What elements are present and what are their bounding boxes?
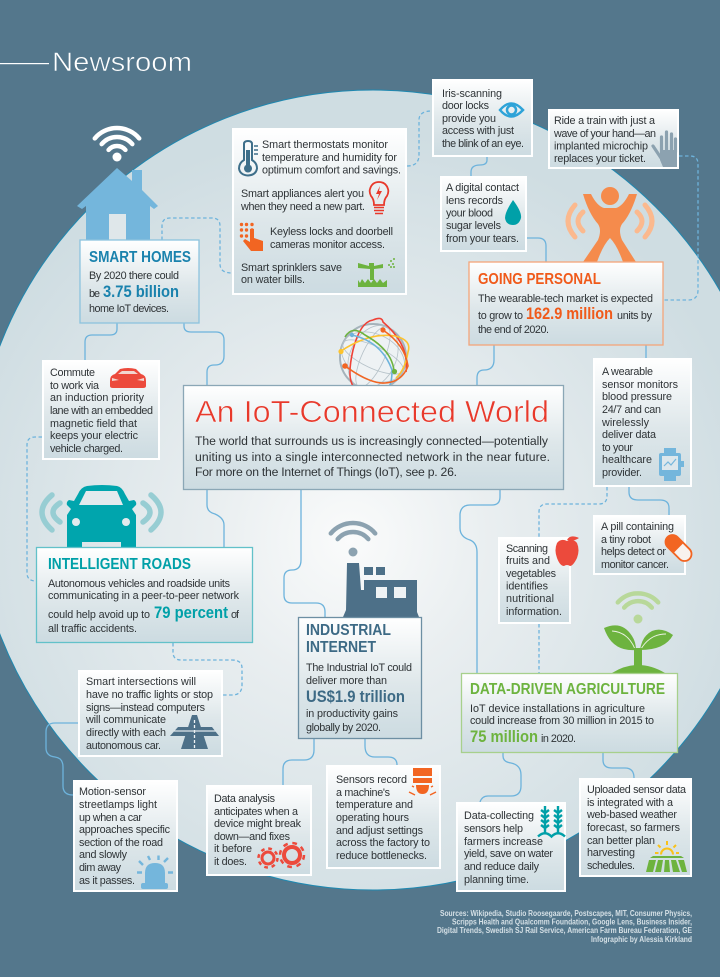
text: data-collecting [464,810,553,886]
icon: alarm light [137,856,173,889]
text: industrial internet stat: US$1.9 trillion [306,687,405,706]
text: agriculture stat: IoT device installations in agriculture [470,703,645,715]
panel: train microchip [549,110,678,168]
text: commute: magnetic field that [50,418,137,430]
text: train: Ride a train with just a [554,115,655,127]
text: train: replaces your ticket. [554,153,646,165]
text: commute: vehicle charged. [50,443,123,455]
text: sprinklers: on water bills. [241,274,305,286]
panel: smart homes [80,240,199,323]
icon: plant with wifi [604,593,673,673]
text: uploaded data: harvesting [587,847,635,859]
icon: teal car with signal waves [42,485,161,547]
text: machine sensors: operating hours [336,812,410,824]
text: pill: A pill containing [601,521,674,533]
text: data analysis [214,793,302,868]
text: introduction: The world that surrounds us is increasingly connected—potentially [195,434,549,448]
text: train: wave of your hand—an [553,128,656,140]
panel: contact lens [441,177,526,251]
icon: sprinkler [358,258,395,287]
text: scanning fruit: Scanning [506,543,548,555]
text: data-collecting: Data-collecting [464,810,534,822]
text: contact lens: lens records [446,195,504,207]
text: uploaded data: is integrated with a [587,797,673,809]
text: locks: Keyless locks and doorbell [270,226,393,238]
text: intersections [85,676,213,752]
text: wearable sensor [601,366,679,479]
text: introduction: uniting us into a single interconnected network in the near future. [195,450,550,464]
text: machine sensors: Sensors record [336,774,407,786]
icon: house with wifi [77,128,158,241]
text: streetlamps [79,786,171,887]
text: uploaded data: can better plan [587,835,655,847]
icon: smart watch [659,448,684,481]
icon: red sports car [110,368,146,388]
text: wearable sensor: wirelessly [601,417,650,429]
text: intelligent roads stat: 79 percent [154,603,228,622]
text: intersections: autonomous car. [86,740,161,752]
icon: gears [258,843,304,868]
section label: Newsroom: Newsroom [52,47,192,77]
text: thermostats: optimum comfort and savings. [262,164,401,176]
text: commute: to work via [50,380,99,392]
panel: uploaded sensor data [580,779,691,876]
text: thermostats: temperature and humidity for [262,152,397,164]
text: agriculture stat: in 2020. [541,733,576,745]
text: wearable sensor: A wearable [602,366,653,378]
text: commute [50,367,153,455]
text: introduction: For more on the Internet of Things (IoT), see p. 26. [195,465,457,479]
text: pill: helps detect or [601,546,666,558]
heading: data-driven agriculture: DATA-DRIVEN AGRICULTURE [470,681,665,698]
text: data-collecting: planning time. [464,874,529,886]
text: pill [601,521,674,571]
icon: eye [500,104,523,116]
text: streetlamps: dim away [79,862,122,874]
text: data-collecting: and reduce daily [464,861,540,873]
text: machine sensors: across the factory to [336,837,430,849]
text: scanning fruit: vegetables [506,568,557,580]
text: iris scanning: door locks [442,100,490,112]
text: commute: Commute [50,367,95,379]
text: uploaded data: web-based weather [586,809,677,821]
icon: thermometer [239,141,258,176]
text: introduction [195,434,550,479]
text: scanning fruit: information. [506,606,562,618]
panel: smart intersections [79,671,222,756]
icon: wheat [538,806,565,836]
text: iris scanning [442,88,524,150]
icon: globe with colored orbits [333,317,413,397]
text: intelligent roads stat: communicating in a peer-to-peer network [48,590,240,602]
panel: smart home features [233,129,406,294]
text: data analysis: it does. [214,856,247,868]
connector lines [27,111,698,802]
text: wearable sensor: blood pressure [602,391,672,403]
text: intersections: have no traffic lights or stop [86,689,213,701]
text: appliances [240,188,365,213]
text: thermostats: Smart thermostats monitor [262,139,388,151]
text: data analysis: it before [214,843,252,855]
icon: highway [170,715,219,749]
text: streetlamps: streetlamps light [79,799,157,811]
text: smart homes stat [89,270,179,315]
heading: going personal: GOING PERSONAL [478,271,601,288]
heading: intelligent roads: INTELLIGENT ROADS [48,556,191,573]
text: going personal stat: the end of 2020. [478,324,549,336]
panel: data-driven agriculture [462,674,678,752]
text: going personal stat: to grow to [478,310,523,322]
panel: going personal [469,262,663,345]
panel: iris scanning [433,80,532,156]
text: machine sensors: and adjust settings [336,825,424,837]
text: machine sensors [336,774,430,862]
text: sprinklers: Smart sprinklers save [241,262,342,274]
text: data analysis: device might break [214,818,302,830]
text: appliances: Smart appliances alert you [241,188,364,200]
icon: factory with wifi [331,523,419,617]
text: going personal stat: units by [617,310,653,322]
text: intersections: Smart intersections will [86,676,196,688]
text: wearable sensor: to your [602,442,633,454]
panel: commute induction lane [43,361,159,459]
text: appliances: when they need a new part. [240,201,365,213]
text: scanning fruit: fruits and [506,555,550,567]
text: commute: an induction priority [50,392,145,404]
text: locks: cameras monitor access. [270,239,385,251]
text: smart homes stat: 3.75 billion [103,282,179,301]
text: pill: monitor cancer. [601,559,669,571]
icon: sun over field [646,841,687,872]
heading: smart homes: SMART HOMES [89,249,191,266]
text: data analysis: Data analysis [214,793,276,805]
text: streetlamps: as it passes. [79,875,135,887]
text: intelligent roads stat: of [231,609,240,621]
text: machine sensors: a machine's [336,787,391,799]
text: wearable sensor: sensor monitors [602,379,679,391]
text: intelligent roads stat [48,578,240,635]
text: iris scanning: the blink of an eye. [442,138,524,150]
text: intersections: directly with each [86,727,166,739]
text: contact lens: from your tears. [446,233,519,245]
text: data-collecting: farmers increase [464,836,543,848]
icon: keypad and finger [240,223,263,251]
text: wearable sensor: 24/7 and can [602,404,661,416]
text: streetlamps: and slowly [79,849,128,861]
text: going personal stat: 162.9 million [526,304,613,323]
text: contact lens: A digital contact [446,182,519,194]
text: smart homes stat: be [89,288,100,300]
text: uploaded data: forecast, so farmers [587,822,681,834]
text: iris scanning: provide you [442,113,496,125]
text: uploaded data: Uploaded sensor data [587,784,686,796]
text: wearable sensor: healthcare [602,454,652,466]
text: smart homes stat: By 2020 there could [89,270,179,282]
text: iris scanning: Iris-scanning [442,88,502,100]
text: industrial internet stat: globally by 2020. [306,722,381,734]
text: train: implanted microchip [554,140,648,152]
text: machine sensors: temperature and [336,799,413,811]
icon: apple [556,536,579,566]
panel: wearable sensor [594,359,691,486]
text: sources and credit: Infographic by Alessia Kirkland [591,935,692,944]
text: uploaded data [586,784,686,872]
text: industrial internet stat: deliver more than [306,675,387,687]
panel: data analysis [207,786,311,875]
text: intelligent roads stat: could help avoid up to [48,609,150,621]
text: industrial internet stat: in productivity gains [306,708,399,720]
heading: industrial internet [306,622,391,656]
text: commute: keeps your electric [50,430,139,442]
text: iris scanning: access with just [442,125,514,137]
text: thermostats [262,139,401,176]
icon: light bulb [370,182,388,214]
panel: industrial internet [298,618,422,738]
text: streetlamps: approaches specific [79,824,171,836]
panel: pill [594,516,694,574]
text: smart homes stat: home IoT devices. [89,303,169,315]
icon: industrial laser [409,768,436,795]
text: wearable sensor: provider. [602,467,642,479]
text: train [553,115,656,165]
text: scanning fruit: identifies [506,580,549,592]
text: agriculture stat: could increase from 30 million in 2015 to [470,715,654,727]
text: industrial internet stat [306,662,412,734]
text: data analysis: anticipates when a [214,806,298,818]
text: intersections: signs—instead computers [86,702,206,714]
text: sources and credit [437,909,693,944]
text: contact lens [446,182,519,245]
text: machine sensors: reduce bottlenecks. [336,850,427,862]
panel: machine sensors [327,766,440,868]
text: data analysis: down—and fixes [214,831,291,843]
panel: intelligent roads [36,548,252,642]
panel: motion-sensor streetlamps [74,781,177,891]
text: industrial internet stat: The Industrial IoT could [306,662,412,674]
text: scanning fruit: nutritional [506,593,554,605]
text: sprinklers [241,262,342,286]
text: intelligent roads stat: all traffic accidents. [48,623,137,635]
text: contact lens: your blood [446,208,493,220]
heading: industrial internet: INTERNET [306,639,376,656]
text: scanning fruit [506,543,562,618]
text: streetlamps: Motion-sensor [79,786,146,798]
icon: water drop [505,200,521,225]
text: data-collecting: yield, save on water [464,848,553,860]
icon: hand [653,132,677,167]
text: streetlamps: section of the road [79,837,163,849]
icon: orange person with signal waves [568,187,652,262]
text: uploaded data: schedules. [587,860,635,872]
panel: main title [184,386,564,490]
text: intersections: will communicate [85,714,166,726]
text: pill: a tiny robot [601,534,651,546]
text: locks [270,226,393,251]
text: streetlamps: up when a car [79,812,142,824]
icon: capsule [663,532,694,564]
panel: data-collecting sensors [457,803,565,891]
text: wearable sensor: deliver data [602,429,656,441]
text: going personal stat: The wearable-tech market is expected [478,293,653,305]
text: agriculture stat [470,703,654,746]
text: contact lens: sugar levels [446,220,502,232]
heading: industrial internet: INDUSTRIAL [306,622,391,639]
text: agriculture stat: 75 million [470,727,538,746]
text: going personal stat [478,293,653,336]
text: intelligent roads stat: Autonomous vehicles and roadside units [48,578,231,590]
panel: scanning fruit [499,536,579,623]
text: commute: lane with an embedded [50,405,153,417]
text: data-collecting: sensors help [464,823,523,835]
title: An IoT-Connected World [195,395,549,429]
